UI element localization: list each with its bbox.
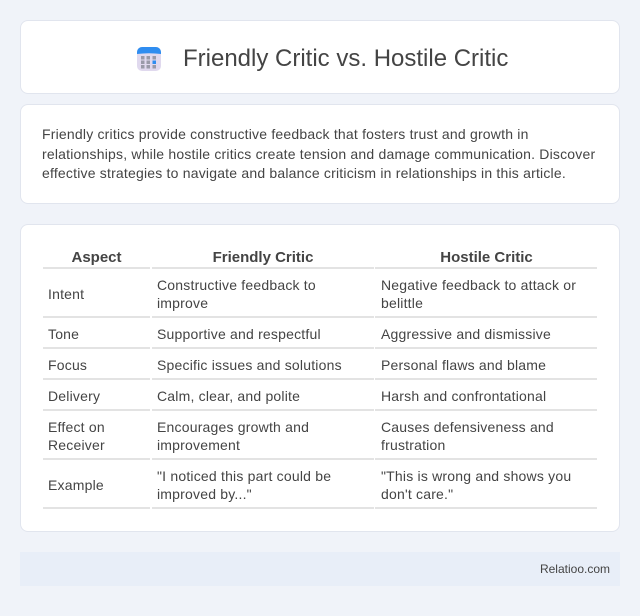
intro paragraph <box>42 126 595 181</box>
footer bar <box>20 552 620 586</box>
intro paragraph: effective strategies to navigate and balance criticism in relationships in this article. <box>42 165 566 181</box>
intro paragraph: relationships, while hostile critics create tension and damage communication. Discover <box>42 146 595 162</box>
row: Intent: Intent <box>48 286 84 302</box>
row: Effect on Receiver: frustration <box>381 437 445 453</box>
row: Effect on Receiver: Encourages growth and <box>157 419 309 435</box>
row: Delivery <box>48 388 546 404</box>
table header: Hostile Critic: Hostile Critic <box>440 249 533 266</box>
intro paragraph: Friendly critics provide constructive feedback that fosters trust and growth in <box>42 126 529 142</box>
row: Effect on Receiver: improvement <box>157 437 240 453</box>
row: Effect on Receiver: Effect on <box>48 419 105 435</box>
row: Intent: Negative feedback to attack or <box>381 277 576 293</box>
panel: intro text <box>20 104 620 204</box>
row: Tone: Supportive and respectful <box>157 326 321 342</box>
row: Tone: Tone <box>48 326 79 342</box>
row: Example: don't care." <box>381 486 453 502</box>
icon: calendar <box>137 47 161 71</box>
row: Focus: Focus <box>48 357 87 373</box>
row: Example: "I noticed this part could be <box>157 468 331 484</box>
row: Focus: Personal flaws and blame <box>381 357 546 373</box>
row: Focus <box>48 357 546 373</box>
row: Intent: belittle <box>381 295 423 311</box>
row: Intent: Constructive feedback to <box>157 277 316 293</box>
row: Example <box>48 468 571 502</box>
footer credit: Relatioo.com <box>540 562 610 576</box>
row: Effect on Receiver: Receiver <box>48 437 105 453</box>
row: Effect on Receiver <box>48 419 554 453</box>
row: Example: improved by..." <box>157 486 252 502</box>
row: Delivery: Calm, clear, and polite <box>157 388 300 404</box>
row: Delivery: Delivery <box>48 388 100 404</box>
title: Friendly Critic vs. Hostile Critic <box>183 45 508 72</box>
row: Example: "This is wrong and shows you <box>381 468 571 484</box>
panel: title card <box>20 20 620 94</box>
row: Tone <box>48 326 551 342</box>
row: Example: Example <box>48 477 104 493</box>
row: Delivery: Harsh and confrontational <box>381 388 546 404</box>
row: Focus: Specific issues and solutions <box>157 357 342 373</box>
table header: Friendly Critic: Friendly Critic <box>213 249 313 266</box>
panel: comparison table <box>20 224 620 532</box>
row: Intent: improve <box>157 295 208 311</box>
row: Intent <box>48 277 576 311</box>
row: Effect on Receiver: Causes defensiveness and <box>381 419 554 435</box>
table header: Aspect: Aspect <box>71 249 122 266</box>
row: Tone: Aggressive and dismissive <box>381 326 551 342</box>
